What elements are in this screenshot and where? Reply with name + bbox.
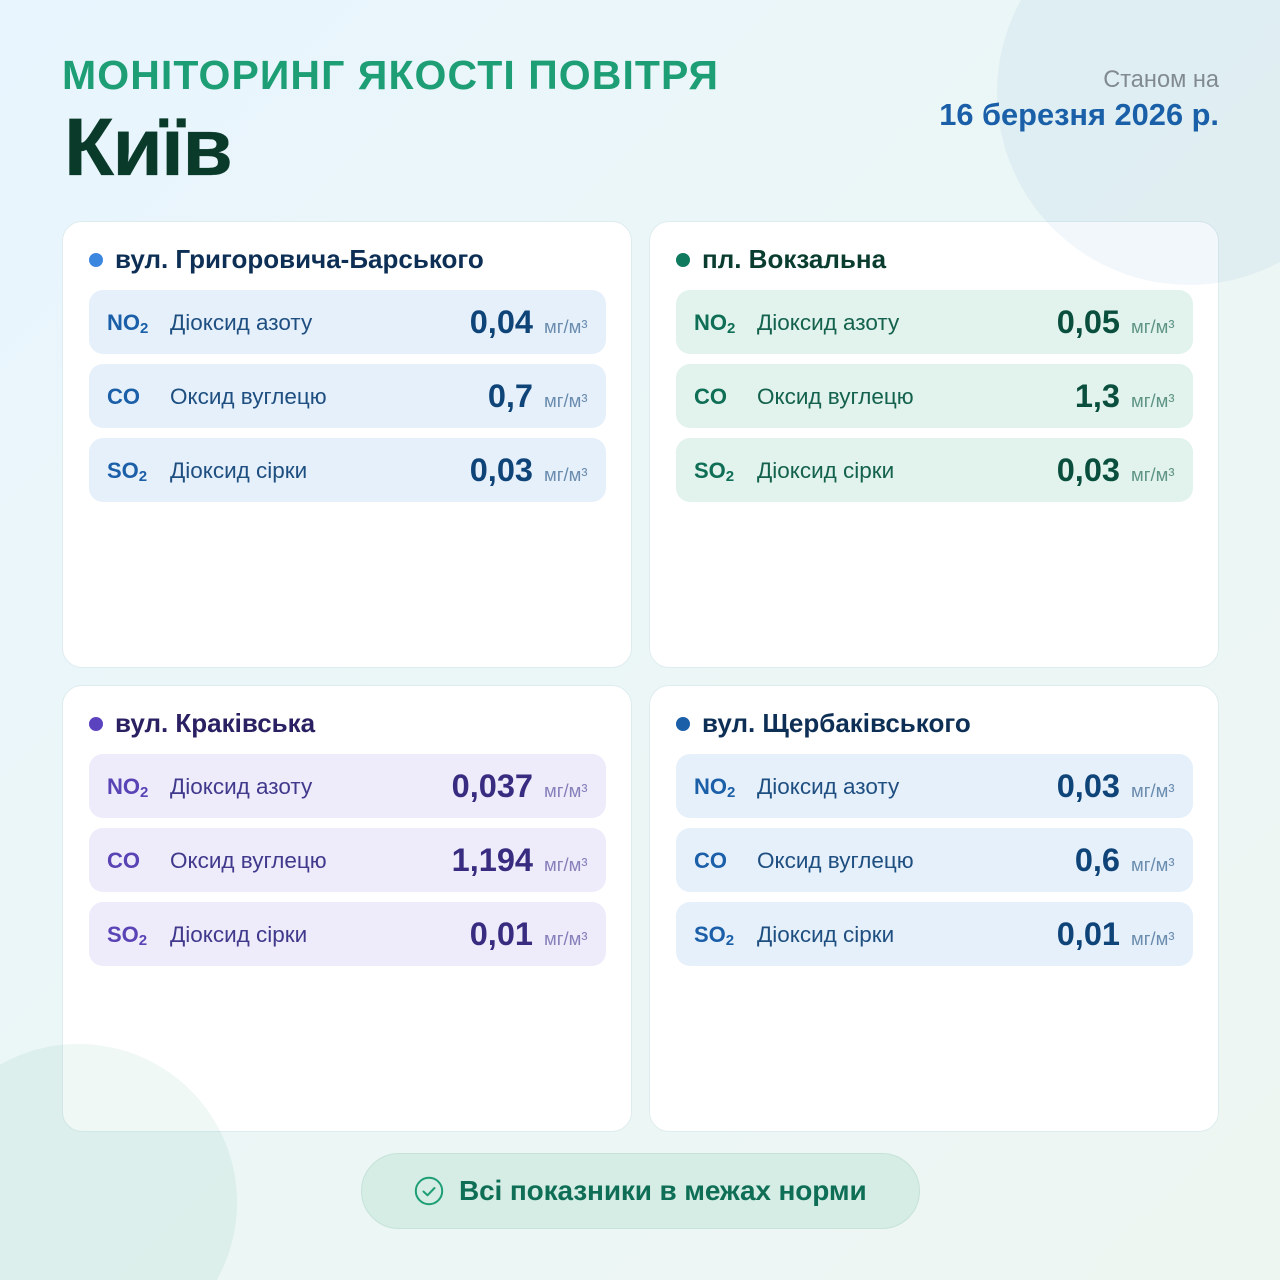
panel: вул. Григоровича-Барського bbox=[62, 221, 632, 668]
row: CO: 1,3 bbox=[1075, 378, 1120, 414]
row: NO2: мг/м³ bbox=[544, 316, 588, 337]
row: SO2: 0,01 bbox=[470, 916, 533, 952]
row: SO2: Діоксид сірки bbox=[757, 922, 894, 947]
station name: вул. Григоровича-Барського bbox=[115, 244, 484, 274]
title: monitoring label: МОНІТОРИНГ ЯКОСТІ ПОВІТРЯ bbox=[62, 52, 719, 98]
row: CO: мг/м³ bbox=[544, 390, 588, 411]
row: NO2: Діоксид азоту bbox=[170, 774, 312, 799]
row: CO: мг/м³ bbox=[1131, 390, 1174, 411]
row: SO2: 0,03 bbox=[470, 452, 533, 488]
row: SO2: Діоксид сірки bbox=[170, 458, 307, 483]
row: NO2: Діоксид азоту bbox=[170, 310, 312, 335]
row: SO2: 0,03 bbox=[1057, 452, 1120, 488]
row: SO2: Діоксид сірки bbox=[757, 458, 894, 483]
heading: city: Київ bbox=[64, 102, 231, 193]
row: SO2 bbox=[89, 438, 606, 502]
row: CO bbox=[676, 828, 1193, 892]
decorative circle: bottom left bbox=[0, 1044, 237, 1280]
row: NO2: Діоксид азоту bbox=[757, 774, 899, 799]
row: NO2 bbox=[89, 754, 606, 818]
row: SO2: Діоксид сірки bbox=[170, 922, 307, 947]
row: CO: мг/м³ bbox=[1131, 854, 1174, 875]
date value: 16 березня 2026 р. bbox=[939, 97, 1219, 132]
status text: Всі показники в межах норми bbox=[459, 1175, 867, 1206]
row: SO2: мг/м³ bbox=[1131, 928, 1174, 949]
row: SO2: мг/м³ bbox=[1131, 464, 1174, 485]
row: NO2: Діоксид азоту bbox=[757, 310, 899, 335]
station dot bbox=[89, 253, 103, 267]
row: NO2: 0,05 bbox=[1057, 304, 1120, 340]
row: CO bbox=[676, 364, 1193, 428]
row: CO: 0,6 bbox=[1075, 842, 1120, 878]
row: CO: CO bbox=[107, 384, 140, 409]
row: NO2 bbox=[676, 754, 1193, 818]
row: CO: Оксид вуглецю bbox=[757, 848, 914, 873]
status pill bbox=[361, 1153, 920, 1229]
row: SO2 bbox=[89, 902, 606, 966]
row: CO: мг/м³ bbox=[544, 854, 588, 875]
row: SO2: мг/м³ bbox=[544, 464, 588, 485]
decorative circle: top right bbox=[997, 0, 1280, 285]
row: NO2: 0,04 bbox=[470, 304, 533, 340]
row: CO bbox=[89, 364, 606, 428]
row: CO: CO bbox=[694, 848, 727, 873]
station name: пл. Вокзальна bbox=[702, 244, 886, 274]
station name: вул. Щербаківського bbox=[702, 708, 971, 738]
row: NO2: NO2 bbox=[694, 774, 735, 801]
row: CO bbox=[89, 828, 606, 892]
row: CO: CO bbox=[107, 848, 140, 873]
row: NO2: мг/м³ bbox=[544, 780, 588, 801]
row: SO2: SO2 bbox=[107, 922, 147, 949]
row: NO2: 0,037 bbox=[452, 768, 533, 804]
station dot bbox=[676, 717, 690, 731]
row: NO2 bbox=[676, 290, 1193, 354]
row: NO2 bbox=[89, 290, 606, 354]
date label: Станом на bbox=[1103, 67, 1219, 93]
row: NO2: NO2 bbox=[107, 774, 148, 801]
row: CO: Оксид вуглецю bbox=[757, 384, 914, 409]
row: SO2: SO2 bbox=[694, 458, 734, 485]
row: CO: 0,7 bbox=[488, 378, 533, 414]
station name: вул. Краківська bbox=[115, 708, 315, 738]
row: NO2: 0,03 bbox=[1057, 768, 1120, 804]
panel: вул. Щербаківського bbox=[649, 685, 1219, 1132]
row: NO2: мг/м³ bbox=[1131, 316, 1174, 337]
row: SO2: 0,01 bbox=[1057, 916, 1120, 952]
row: NO2: мг/м³ bbox=[1131, 780, 1174, 801]
row: SO2: мг/м³ bbox=[544, 928, 588, 949]
row: CO: CO bbox=[694, 384, 727, 409]
panel: вул. Краківська bbox=[62, 685, 632, 1132]
station dot bbox=[89, 717, 103, 731]
row: SO2: SO2 bbox=[694, 922, 734, 949]
row: NO2: NO2 bbox=[694, 310, 735, 337]
row: CO: Оксид вуглецю bbox=[170, 384, 327, 409]
row: SO2: SO2 bbox=[107, 458, 147, 485]
panel: пл. Вокзальна bbox=[649, 221, 1219, 668]
icon: check circle bbox=[414, 1176, 444, 1206]
row: SO2 bbox=[676, 902, 1193, 966]
station dot bbox=[676, 253, 690, 267]
row: CO: 1,194 bbox=[452, 842, 533, 878]
row: NO2: NO2 bbox=[107, 310, 148, 337]
row: SO2 bbox=[676, 438, 1193, 502]
row: CO: Оксид вуглецю bbox=[170, 848, 327, 873]
